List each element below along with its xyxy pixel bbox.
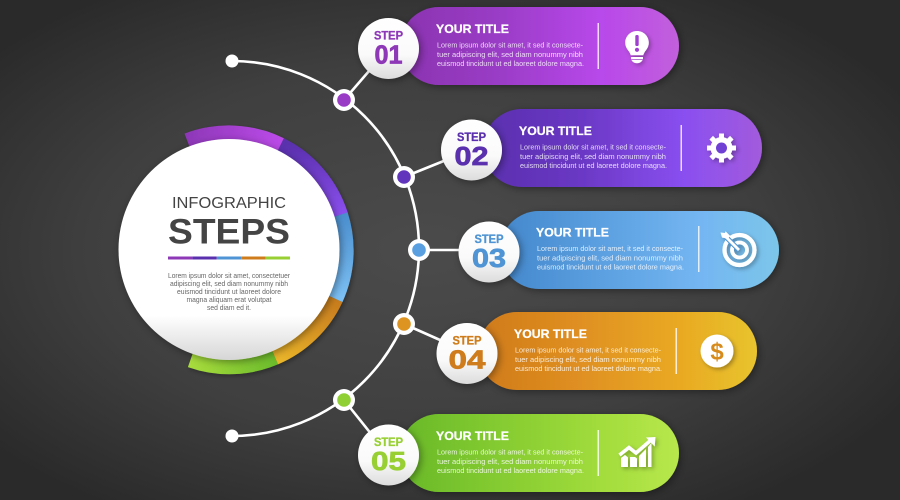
panel: step 4 (436, 312, 757, 390)
title: YOUR TITLE (436, 429, 509, 443)
node 1 (333, 89, 355, 111)
body text: adipiscing elit, sed diam nonummy nibh (170, 279, 288, 288)
step badge: 02 (454, 141, 488, 171)
icon: growth chart (620, 437, 656, 467)
node 2 (393, 166, 415, 188)
text block: Lorem ipsum dolor sit amet, it sed it consecte- (520, 142, 667, 152)
text block (437, 448, 584, 475)
step badge: STEP (374, 30, 403, 42)
pill (400, 414, 679, 492)
pill (500, 211, 779, 289)
body text: euismod tincidunt ut laoreet dolore (177, 287, 281, 296)
pill (478, 312, 757, 390)
text block: euismod tincidunt ut ed laoreet dolore magna. (537, 262, 684, 272)
body text: sed diam ed it. (207, 303, 251, 312)
title: YOUR TITLE (536, 226, 609, 240)
step badge (358, 18, 419, 79)
heading: steps: STEPS (168, 212, 290, 252)
text block: tuer adipiscing elit, sed diam nonummy nibh (520, 152, 666, 161)
heading: infographic: INFOGRAPHIC (172, 195, 286, 212)
step badge (436, 323, 498, 384)
node 3 (408, 239, 430, 261)
panel: step 3 (458, 211, 779, 289)
icon: dollar coin (700, 334, 734, 368)
text block: euismod tincidunt ut ed laoreet dolore magna. (515, 364, 662, 373)
text block: euismod tincidunt ut ed laoreet dolore magna. (437, 466, 584, 475)
text block (537, 244, 684, 272)
text block (515, 346, 662, 373)
step badge: STEP (374, 437, 403, 449)
step badge: STEP (457, 132, 486, 144)
step badge (358, 424, 419, 486)
icon: target (720, 231, 754, 265)
title: YOUR TITLE (519, 124, 592, 138)
text block: tuer adipiscing elit, sed diam nonummy nibh (537, 254, 683, 262)
text block: euismod tincidunt ut ed laoreet dolore magna. (520, 161, 667, 170)
segmented ring (187, 133, 346, 367)
node 4 (393, 313, 415, 335)
body text: Lorem ipsum dolor sit amet, consectetuer (168, 271, 291, 280)
panel: step 5 (358, 414, 679, 492)
timeline arc (226, 49, 489, 455)
text block: Lorem ipsum dolor sit amet, it sed it consecte- (437, 448, 584, 456)
icon: dollar coin: $ (710, 338, 724, 366)
text block: tuer adipiscing elit, sed diam nonummy nibh (437, 457, 583, 466)
step badge: STEP (474, 234, 504, 246)
text block (437, 40, 584, 68)
panel: step 2 (441, 109, 762, 187)
colour bar (168, 256, 290, 260)
pill (400, 7, 679, 85)
step badge: 03 (472, 243, 506, 273)
step badge: 04 (448, 344, 486, 374)
icon: gear (707, 134, 736, 162)
text block: Lorem ipsum dolor sit amet, it sed it consecte- (437, 40, 584, 50)
step badge: 01 (374, 40, 402, 70)
panel: step 1 (358, 7, 679, 85)
text block: euismod tincidunt ut ed laoreet dolore magna. (437, 59, 584, 68)
text block: tuer adipiscing elit, sed diam nonummy nibh (515, 355, 661, 364)
body text (168, 271, 291, 312)
title: YOUR TITLE (436, 22, 509, 36)
node 5 (333, 389, 355, 411)
body text: magna aliquam erat volutpat (186, 295, 272, 304)
text block: Lorem ipsum dolor sit amet, it sed it consecte- (537, 244, 684, 253)
pill (483, 109, 762, 187)
step badge (441, 120, 502, 180)
icon: light bulb (625, 31, 649, 63)
step badge: 05 (371, 446, 406, 476)
text block (520, 142, 667, 170)
step badge (458, 222, 520, 282)
text block: tuer adipiscing elit, sed diam nonummy nibh (437, 50, 583, 59)
panel: central circle (118, 139, 340, 360)
title: YOUR TITLE (514, 327, 587, 341)
text block: Lorem ipsum dolor sit amet, it sed it consecte- (515, 346, 662, 354)
step badge: STEP (452, 336, 482, 348)
